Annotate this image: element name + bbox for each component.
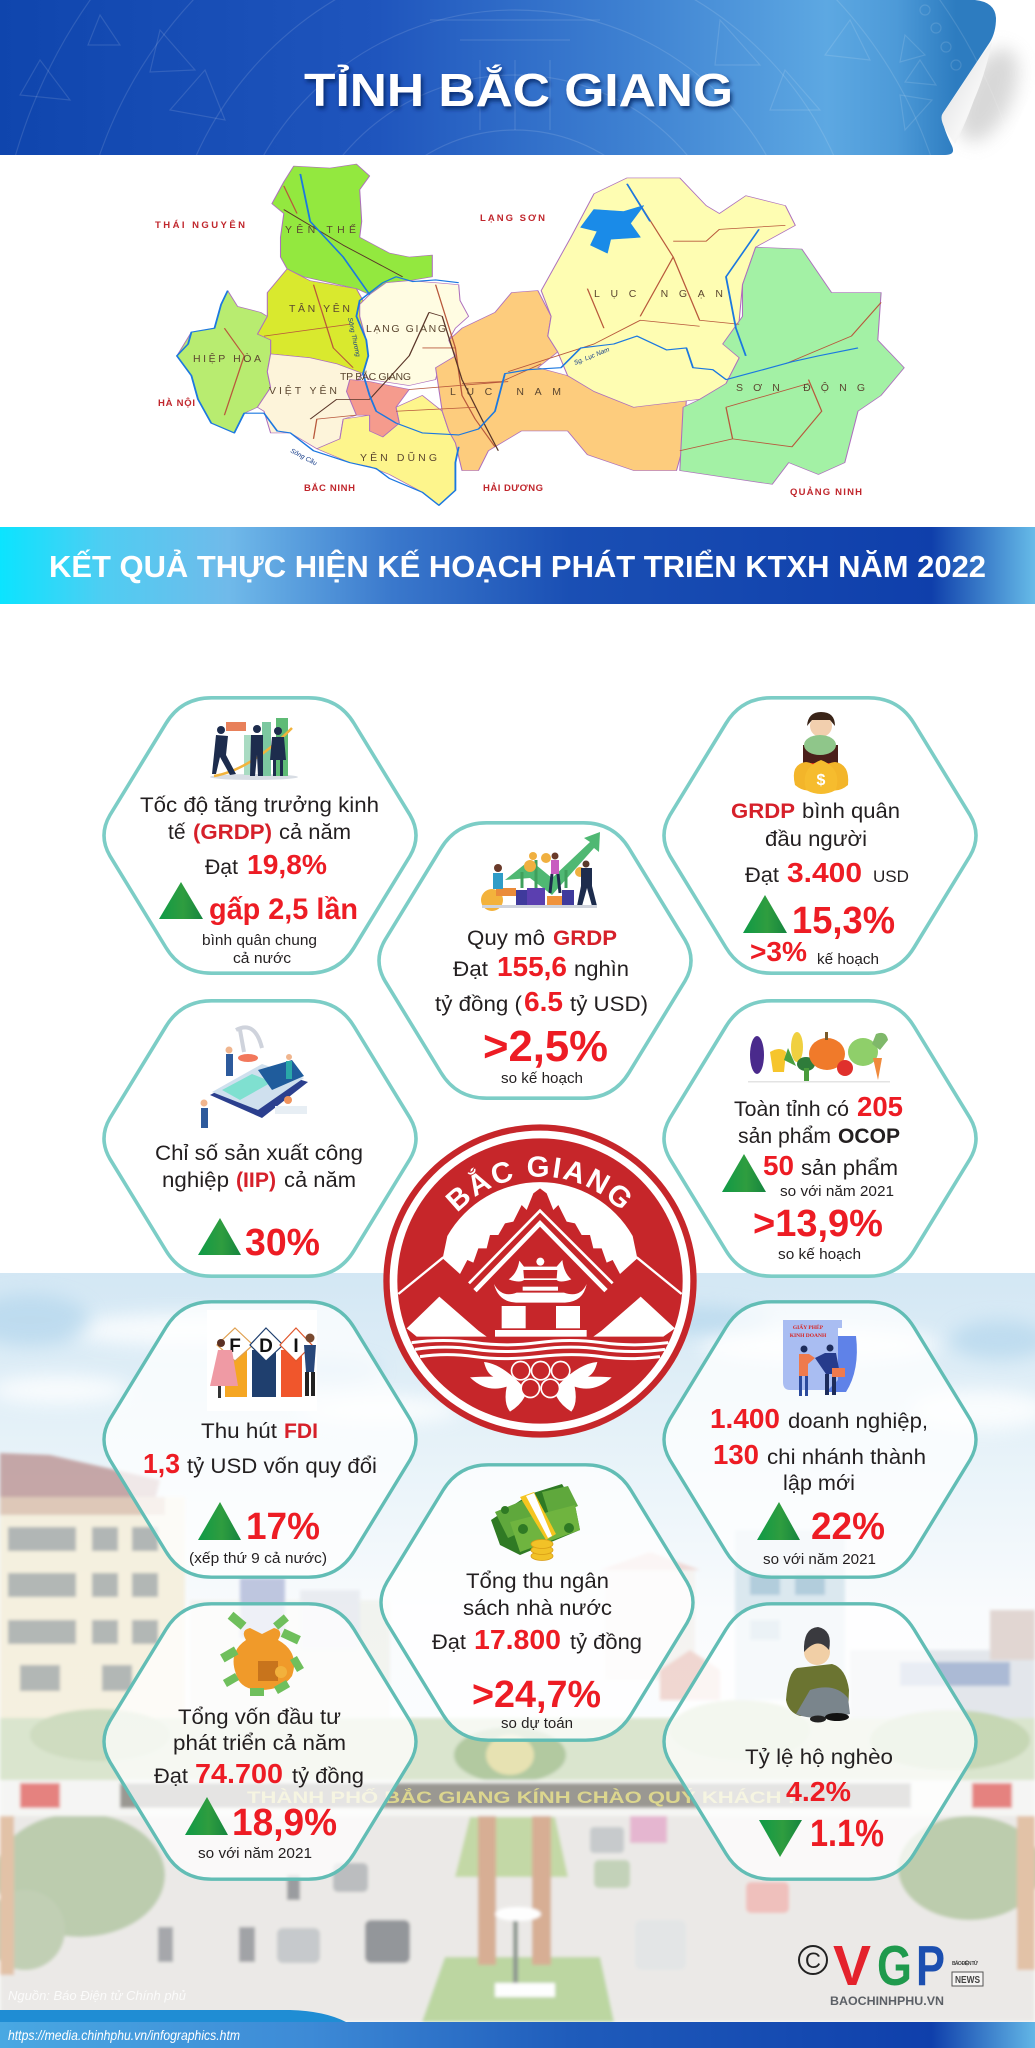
text block xyxy=(154,1706,364,1862)
section banner xyxy=(0,527,1035,604)
panel: total investment xyxy=(104,1604,416,1879)
text block: nghìn xyxy=(574,958,629,981)
neighbour labels: BẮC NINH xyxy=(304,483,355,494)
leaves and fruits xyxy=(470,1361,612,1412)
text block xyxy=(731,800,909,968)
icon: industrial robot and tablet xyxy=(200,1027,308,1128)
rivers xyxy=(177,174,858,505)
icon: up arrow xyxy=(743,895,787,933)
text block: 155,6 xyxy=(497,951,567,982)
sky and roof xyxy=(443,1182,637,1274)
icon: up arrow xyxy=(185,1797,228,1835)
district labels: SƠN ĐỘNG xyxy=(736,381,865,394)
text block xyxy=(140,794,379,967)
neighbour labels: HẢI DƯƠNG xyxy=(483,482,543,494)
text block: sách nhà nước xyxy=(463,1597,612,1620)
text block: Đạt xyxy=(432,1631,466,1654)
district labels: HIỆP HÒA xyxy=(193,352,261,365)
text block: 19,8% xyxy=(247,849,327,880)
panel: new enterprises xyxy=(664,1302,976,1577)
text block: kế hoạch xyxy=(817,951,879,968)
text block: tế xyxy=(168,821,186,844)
icon: up arrow xyxy=(757,1502,800,1540)
text block: so dự toán xyxy=(501,1715,573,1732)
neighbour labels: LẠNG SƠN xyxy=(480,213,545,224)
text block xyxy=(734,1091,903,1263)
text block: cả năm xyxy=(279,821,351,844)
text block: USD xyxy=(873,867,909,886)
icon: FDI letters and people: I xyxy=(293,1336,299,1357)
district labels: LỤC NAM xyxy=(450,386,561,398)
icon: man with money bags: $ xyxy=(817,772,826,789)
gantry sign text: THÀNH PHỐ BẮC GIANG KÍNH CHÀO QUÝ KHÁCH ! xyxy=(247,1787,795,1807)
district: Yên Thế xyxy=(272,164,432,295)
text block xyxy=(143,1420,377,1567)
icon: business licence handshake xyxy=(783,1320,857,1396)
text block: >3% xyxy=(750,936,807,967)
neighbour labels: HÀ NỘI xyxy=(158,397,195,409)
text block: đầu người xyxy=(765,828,867,851)
emblem: Bắc Giang xyxy=(383,1124,697,1438)
text block: sản phẩm xyxy=(738,1125,831,1148)
vehicles xyxy=(158,1815,789,1970)
icon: money plants and growth arrow xyxy=(481,832,600,911)
icon: FDI letters and people: F xyxy=(229,1336,241,1357)
footer bar xyxy=(0,2010,1035,2048)
header curl shadow xyxy=(946,40,1030,150)
temple xyxy=(494,1258,587,1337)
icon: up arrow xyxy=(159,882,203,919)
text block: (GRDP) xyxy=(193,821,272,844)
text block: bình quân chung xyxy=(202,932,317,949)
text block xyxy=(435,927,648,1087)
text block: doanh nghiệp, xyxy=(788,1410,928,1433)
icon: up arrow xyxy=(198,1502,241,1540)
lake xyxy=(581,206,644,253)
tree band xyxy=(0,1718,1035,1784)
text block: 22% xyxy=(811,1506,885,1548)
drum pattern xyxy=(0,0,1035,820)
map of Bắc Giang province xyxy=(155,164,904,505)
district labels: LỤC NGẠN xyxy=(594,288,723,300)
text block xyxy=(432,1570,642,1732)
text block: so kế hoạch xyxy=(501,1070,583,1087)
logo: VGP: P xyxy=(916,1934,945,1998)
text block: so với năm 2021 xyxy=(763,1551,876,1568)
background photo: Bắc Giang street xyxy=(0,1273,1035,2023)
river labels: Sg. Lục Nam xyxy=(573,346,611,367)
text block xyxy=(745,1746,893,1855)
text block: (xếp thứ 9 cả nước) xyxy=(189,1550,327,1567)
logo: VGP: G xyxy=(877,1934,912,1998)
text block: so với năm 2021 xyxy=(198,1845,312,1862)
text block xyxy=(710,1403,928,1568)
district: TP Bắc Giang xyxy=(346,380,409,437)
panel: IIP xyxy=(104,1001,416,1276)
text block: Đạt xyxy=(205,856,238,879)
district labels: YÊN THẾ xyxy=(285,223,356,236)
district: Lục Nam xyxy=(436,291,686,471)
text block: 130 xyxy=(713,1439,759,1470)
icon: up arrow xyxy=(198,1218,241,1255)
text block: Toàn tỉnh có xyxy=(734,1098,849,1121)
district labels: LẠNG GIANG xyxy=(366,323,446,335)
neighbour labels xyxy=(155,213,862,498)
section heading: KẾT QUẢ THỰC HIỆN KẾ HOẠCH PHÁT TRIỂN KTXH NĂM 2022 xyxy=(49,548,986,584)
panel: OCOP xyxy=(664,1001,976,1276)
railway xyxy=(284,210,498,451)
roads xyxy=(224,184,881,451)
district: Hiệp Hòa xyxy=(177,291,271,433)
logo: VGP: BAOCHINHPHU.VN xyxy=(830,1994,944,2008)
text block: 205 xyxy=(857,1091,903,1122)
gantry xyxy=(0,1780,1035,1816)
text block: tỷ đồng ( xyxy=(435,993,522,1016)
text block: 6.5 xyxy=(524,986,563,1017)
text block: 30% xyxy=(245,1222,320,1264)
district: Yên Dũng xyxy=(317,395,459,505)
icon: man with money bags xyxy=(794,712,848,794)
text block: so kế hoạch xyxy=(778,1246,861,1263)
text block: phát triển cả năm xyxy=(173,1732,346,1755)
text block: 15,3% xyxy=(792,900,895,942)
district: Sơn Động xyxy=(680,247,904,484)
logo: VGP xyxy=(799,1934,983,2008)
text block: Đạt xyxy=(453,958,488,981)
river xyxy=(412,1340,668,1359)
text block: Thu hút xyxy=(201,1420,277,1443)
text block: nghiệp xyxy=(162,1169,229,1192)
text block: 1.400 xyxy=(710,1403,780,1434)
panel: state budget revenue xyxy=(381,1465,693,1740)
text block: >2,5% xyxy=(483,1022,608,1071)
emblem name: BẮC GIANG xyxy=(445,1156,630,1212)
text block: 3.400 xyxy=(787,857,862,888)
icon: business team and chart xyxy=(210,718,298,780)
title: TỈNH BẮC GIANG xyxy=(304,64,733,116)
panel: GRDP per capita xyxy=(664,698,976,973)
text block: so với năm 2021 xyxy=(780,1183,894,1200)
panel: FDI xyxy=(104,1302,416,1577)
text block: (IIP) xyxy=(236,1169,276,1192)
icon: FDI letters and people xyxy=(207,1310,317,1411)
title banner xyxy=(0,0,1035,820)
source credit: Nguồn: Báo Điện tử Chính phủ xyxy=(8,1988,186,2003)
river labels: Sông Thương xyxy=(346,317,361,358)
text block: sản phẩm xyxy=(801,1157,898,1180)
district labels: VIỆT YÊN xyxy=(269,384,337,397)
text block: gấp 2,5 lần xyxy=(209,893,358,926)
district: Lục Ngạn xyxy=(541,178,795,407)
text block: GRDP xyxy=(553,927,617,950)
text block: 4.2% xyxy=(786,1776,851,1807)
text block: 50 xyxy=(763,1150,794,1181)
text block: chi nhánh thành xyxy=(767,1446,926,1469)
icon: money bag with banknotes xyxy=(220,1612,304,1696)
text block: Đạt xyxy=(745,864,779,887)
text block: FDI xyxy=(284,1420,318,1443)
neighbour labels: QUẢNG NINH xyxy=(790,486,862,498)
icon: up arrow xyxy=(722,1154,766,1192)
text block: cả nước xyxy=(233,950,292,967)
text block: 1,3 xyxy=(143,1448,180,1479)
district: Việt Yên xyxy=(257,354,363,449)
river labels xyxy=(289,317,611,468)
text block: 18,9% xyxy=(232,1802,337,1844)
text block: tỷ USD vốn quy đổi xyxy=(187,1455,377,1478)
text block xyxy=(155,1142,363,1264)
text block: 17% xyxy=(246,1506,320,1548)
text block: tỷ đồng xyxy=(292,1765,364,1788)
icon: business licence handshake: KINH DOANH xyxy=(790,1333,827,1339)
text block: OCOP xyxy=(838,1125,900,1148)
text block: Tổng vốn đầu tư xyxy=(178,1706,341,1729)
icon: poor man sitting xyxy=(786,1627,850,1722)
white mountains xyxy=(407,1297,675,1337)
panel: poverty rate xyxy=(664,1604,976,1879)
district labels: TP BẮC GIANG xyxy=(340,370,411,383)
panel: GRDP size xyxy=(379,823,691,1098)
text block: Chỉ số sản xuất công xyxy=(155,1142,363,1165)
header page curl xyxy=(942,42,992,144)
icon: down arrow xyxy=(759,1820,802,1857)
text block: 17.800 xyxy=(474,1624,561,1655)
text block: 74.700 xyxy=(195,1758,283,1789)
logo: VGP: BÁO ĐIỆN TỬ xyxy=(952,1959,979,1967)
text block: 1.1% xyxy=(810,1813,884,1855)
district: Tân Yên xyxy=(257,269,368,374)
text block: lập mới xyxy=(783,1472,855,1495)
text block: Tổng thu ngân xyxy=(466,1570,609,1593)
logo: VGP: C xyxy=(805,1948,821,1973)
river labels: Sông Cầu xyxy=(289,446,319,468)
text block: cả năm xyxy=(284,1169,356,1192)
road xyxy=(0,1800,1035,2022)
footer url: https://media.chinhphu.vn/infographics.htm xyxy=(8,2027,240,2043)
panel: GRDP growth xyxy=(104,698,416,973)
district: Lạng Giang xyxy=(360,281,469,386)
icon: banknote stacks and coins xyxy=(491,1484,580,1560)
district labels xyxy=(193,223,865,464)
text block: GRDP xyxy=(731,800,795,823)
district labels: YÊN DŨNG xyxy=(360,451,437,464)
icon: FDI letters and people: D xyxy=(259,1336,273,1357)
icon: cartoon vegetables xyxy=(748,1032,890,1082)
text block: Đạt xyxy=(154,1765,188,1788)
buildings xyxy=(0,1497,185,1787)
text block: Quy mô xyxy=(467,927,545,950)
logo: VGP: NEWS xyxy=(955,1975,980,1986)
text block: bình quân xyxy=(802,800,900,823)
text block: Tốc độ tăng trưởng kinh xyxy=(140,794,379,817)
district labels: TÂN YÊN xyxy=(289,302,350,315)
logo: VGP: V xyxy=(833,1934,871,1998)
text block: >24,7% xyxy=(472,1674,601,1716)
neighbour labels: THÁI NGUYÊN xyxy=(155,219,245,231)
text block: Tỷ lệ hộ nghèo xyxy=(745,1746,893,1769)
text block: >13,9% xyxy=(753,1203,883,1245)
text block: tỷ đồng xyxy=(570,1631,642,1654)
icon: business licence handshake: GIẤY PHÉP xyxy=(793,1323,824,1331)
text block: tỷ USD) xyxy=(570,993,648,1016)
